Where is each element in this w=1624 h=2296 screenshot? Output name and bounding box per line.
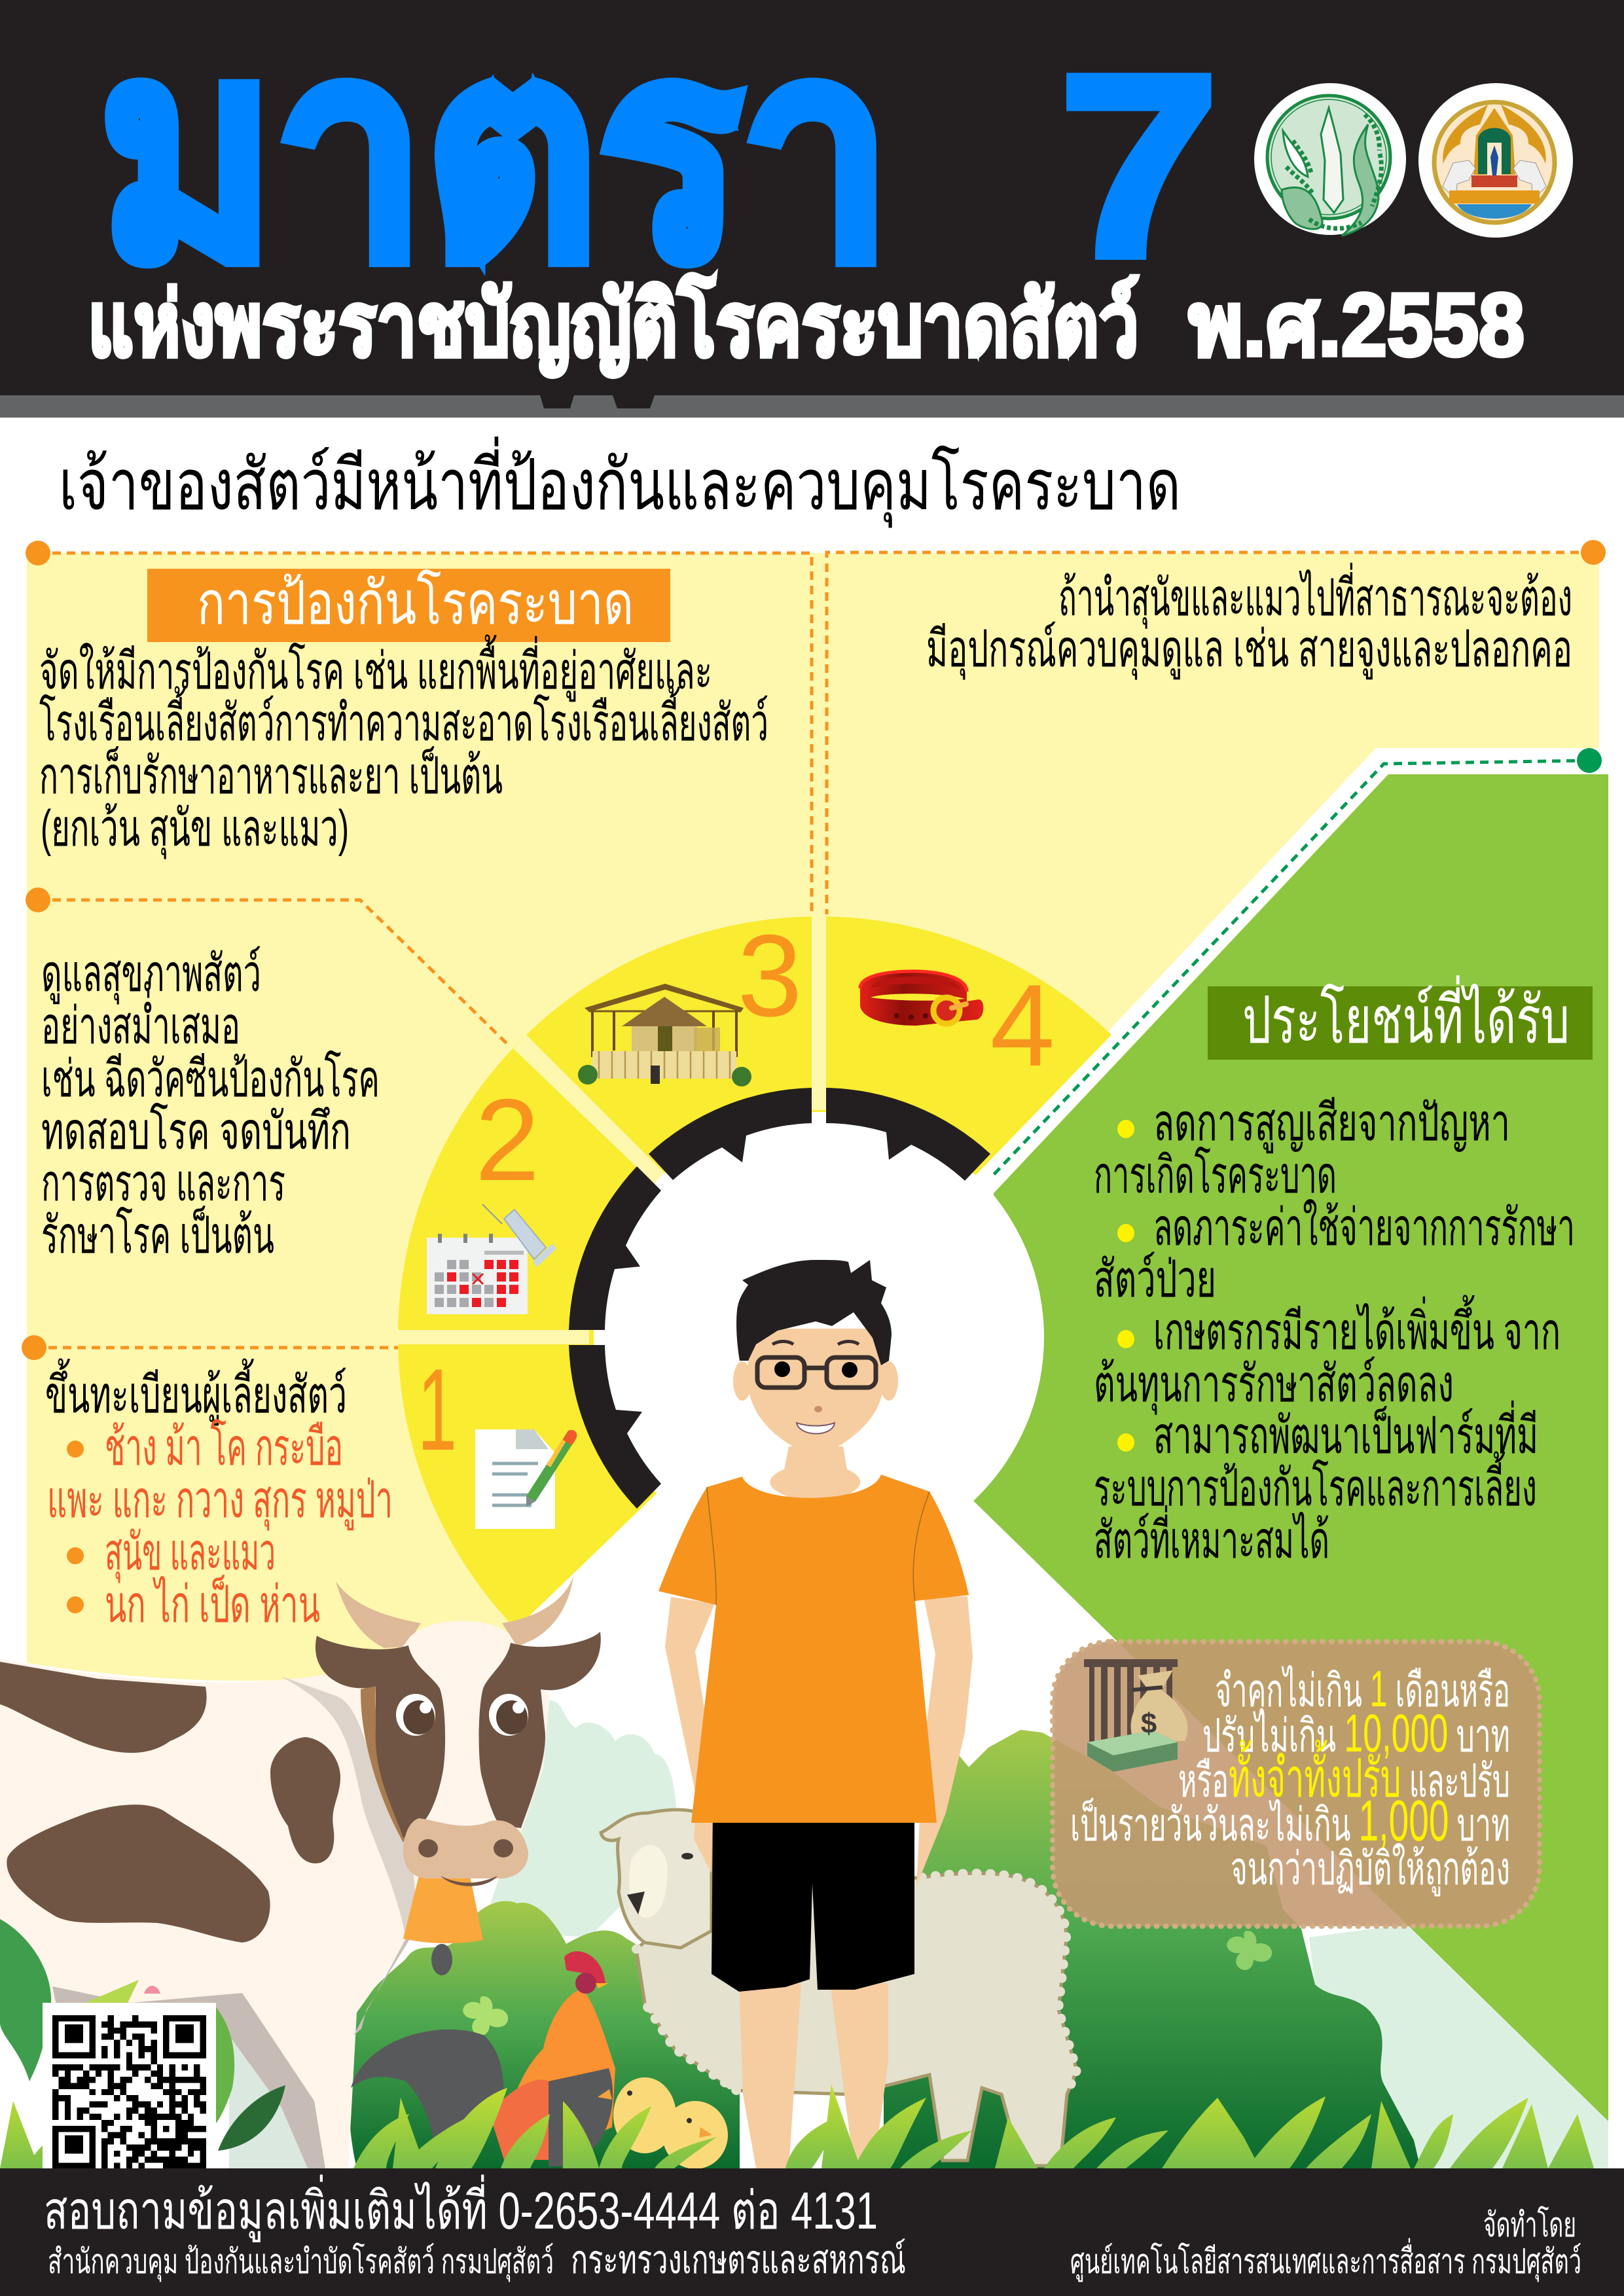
cow bell <box>403 1876 483 1975</box>
text block: prevention body: (ยกเว้น สุนัข และแมว) <box>41 799 349 859</box>
text block: benefits list: สัตว์ป่วย <box>1094 1250 1216 1308</box>
text block: prevention body: โรงเรือนเลี้ยงสัตว์การทำความสะอาดโรงเรือนเลี้ยงสัตว์ <box>39 686 768 751</box>
heading: เจ้าของสัตว์มีหน้าที่ป้องกันและควบคุมโรคระบาด <box>59 437 1181 528</box>
person arms <box>665 1596 973 1886</box>
text block: benefits list <box>1094 1094 1575 1569</box>
text block: registration: นก ไก่ เป็ด ห่าน <box>105 1575 320 1633</box>
plants lower left <box>0 1919 285 2151</box>
title: 7 <box>1059 21 1219 310</box>
numbers on wheel: 4 <box>990 960 1055 1090</box>
person glasses <box>757 1357 876 1388</box>
numbers on wheel: 3 <box>737 910 803 1041</box>
numbers on wheel: 2 <box>475 1075 539 1205</box>
panel: light yellow background <box>27 553 1599 1681</box>
rooster <box>351 1951 615 2166</box>
text block: benefits list: สัตว์ที่เหมาะสมได้ <box>1094 1505 1329 1569</box>
person hair <box>736 1260 892 1365</box>
wheel of four steps <box>393 913 1111 1629</box>
background mint bushes <box>481 1700 1608 2168</box>
text block: penalty <box>1070 1660 1510 1897</box>
text block: health care: ดูแลสุขภาพสัตว์ <box>41 944 261 1005</box>
text block: registration <box>45 1358 393 1633</box>
icon: ministry seal gold <box>1418 83 1573 238</box>
icon: jail bars and money: $ <box>1141 1708 1157 1740</box>
icon: jail bars and money <box>1084 1659 1188 1772</box>
text block: health care: อย่างสม่ำเสมอ <box>41 991 240 1054</box>
cow head <box>316 1576 601 1975</box>
person legs <box>739 1983 888 2168</box>
panel: benefits green <box>973 774 1608 2121</box>
text block: health care: ทดสอบโรค จดบันทึก <box>41 1102 351 1160</box>
QR code <box>43 2003 216 2176</box>
text block: leash requirement <box>926 563 1572 680</box>
wheel dark gear segments <box>569 1088 990 1509</box>
grass <box>0 2085 1594 2168</box>
text block: registration: ช้าง ม้า โค กระบือ <box>105 1418 343 1476</box>
text block: prevention body <box>39 634 768 859</box>
chicks <box>598 2077 728 2169</box>
text block: prevention body: จัดให้มีการป้องกันโรค เช่น แยกพื้นที่อยู่อาศัยและ <box>39 634 712 702</box>
person shorts <box>712 1820 914 1992</box>
panel: prevention text <box>39 569 768 859</box>
penalty box <box>1053 1641 1540 1926</box>
text block: penalty: หรือทั้งจำทั้งปรับ และปรับ <box>1178 1740 1510 1808</box>
section heading: prevention: การป้องกันโรคระบาด <box>197 569 634 637</box>
connector lines and dots <box>22 540 1606 1360</box>
cow body <box>0 1659 432 2168</box>
contact line: สอบถามข้อมูลเพิ่มเติมได้ที่ 0-2653-4444 ต่อ 4131 <box>44 2175 878 2242</box>
footer <box>0 2168 1624 2296</box>
text block: registration: ขึ้นทะเบียนผู้เลี้ยงสัตว์ <box>45 1358 347 1426</box>
text block: prevention body: การเก็บรักษาอาหารและยา เป็นต้น <box>39 746 503 804</box>
background bush right <box>884 1730 1420 2168</box>
text block: health care <box>41 944 380 1264</box>
text block: health care: เช่น ฉีดวัคซีนป้องกันโรค <box>41 1050 380 1107</box>
person face <box>733 1361 751 1401</box>
sheep <box>601 1810 1077 2166</box>
ministry line: กระทรวงเกษตรและสหกรณ์ <box>571 2238 906 2282</box>
subtitle: แห่งพระราชบัญญัติโรคระบาดสัตว์ <box>88 273 1139 378</box>
cow tail <box>336 2045 351 2106</box>
numbers on wheel <box>418 910 1055 1475</box>
person <box>659 1260 973 2168</box>
text block: benefits list: การเกิดโรคระบาด <box>1094 1146 1337 1204</box>
text block: health care: การตรวจ และการ <box>41 1154 285 1211</box>
icon: calendar and syringe <box>427 1204 556 1314</box>
cow spots <box>0 1662 340 1943</box>
credit label: จัดทำโดย <box>1483 2206 1576 2244</box>
numbers on wheel: 1 <box>418 1344 457 1475</box>
person shirt <box>659 1475 969 1823</box>
subtitle: พ.ศ.2558 <box>1189 275 1525 374</box>
header band <box>0 0 1624 418</box>
icon: department seal green <box>1254 83 1406 236</box>
icon: document and pen <box>475 1429 577 1529</box>
person neck <box>770 1446 860 1503</box>
wheel sector ring <box>398 916 1111 1629</box>
icon: farm house <box>578 984 751 1086</box>
bush clover details <box>463 1931 1272 2036</box>
department line: สำนักควบคุม ป้องกันและบำบัดโรคสัตว์ กรมปศุสัตว์ <box>48 2242 554 2282</box>
text block: penalty: ปรับไม่เกิน 10,000 บาท <box>1202 1704 1510 1763</box>
text block: health care: รักษาโรค เป็นต้น <box>41 1206 274 1264</box>
text block: penalty: จำคุกไม่เกิน 1 เดือนหรือ <box>1215 1660 1510 1719</box>
text block: penalty: เป็นรายวันวันละไม่เกิน 1,000 บาท <box>1070 1788 1510 1853</box>
text block: registration: แพะ แกะ กวาง สุกร หมูป่า <box>47 1471 393 1531</box>
cow <box>0 1576 601 2168</box>
background bush left <box>348 1901 740 2168</box>
text block: registration: สุนัข และแมว <box>105 1523 276 1583</box>
icon: red collar <box>860 971 983 1026</box>
